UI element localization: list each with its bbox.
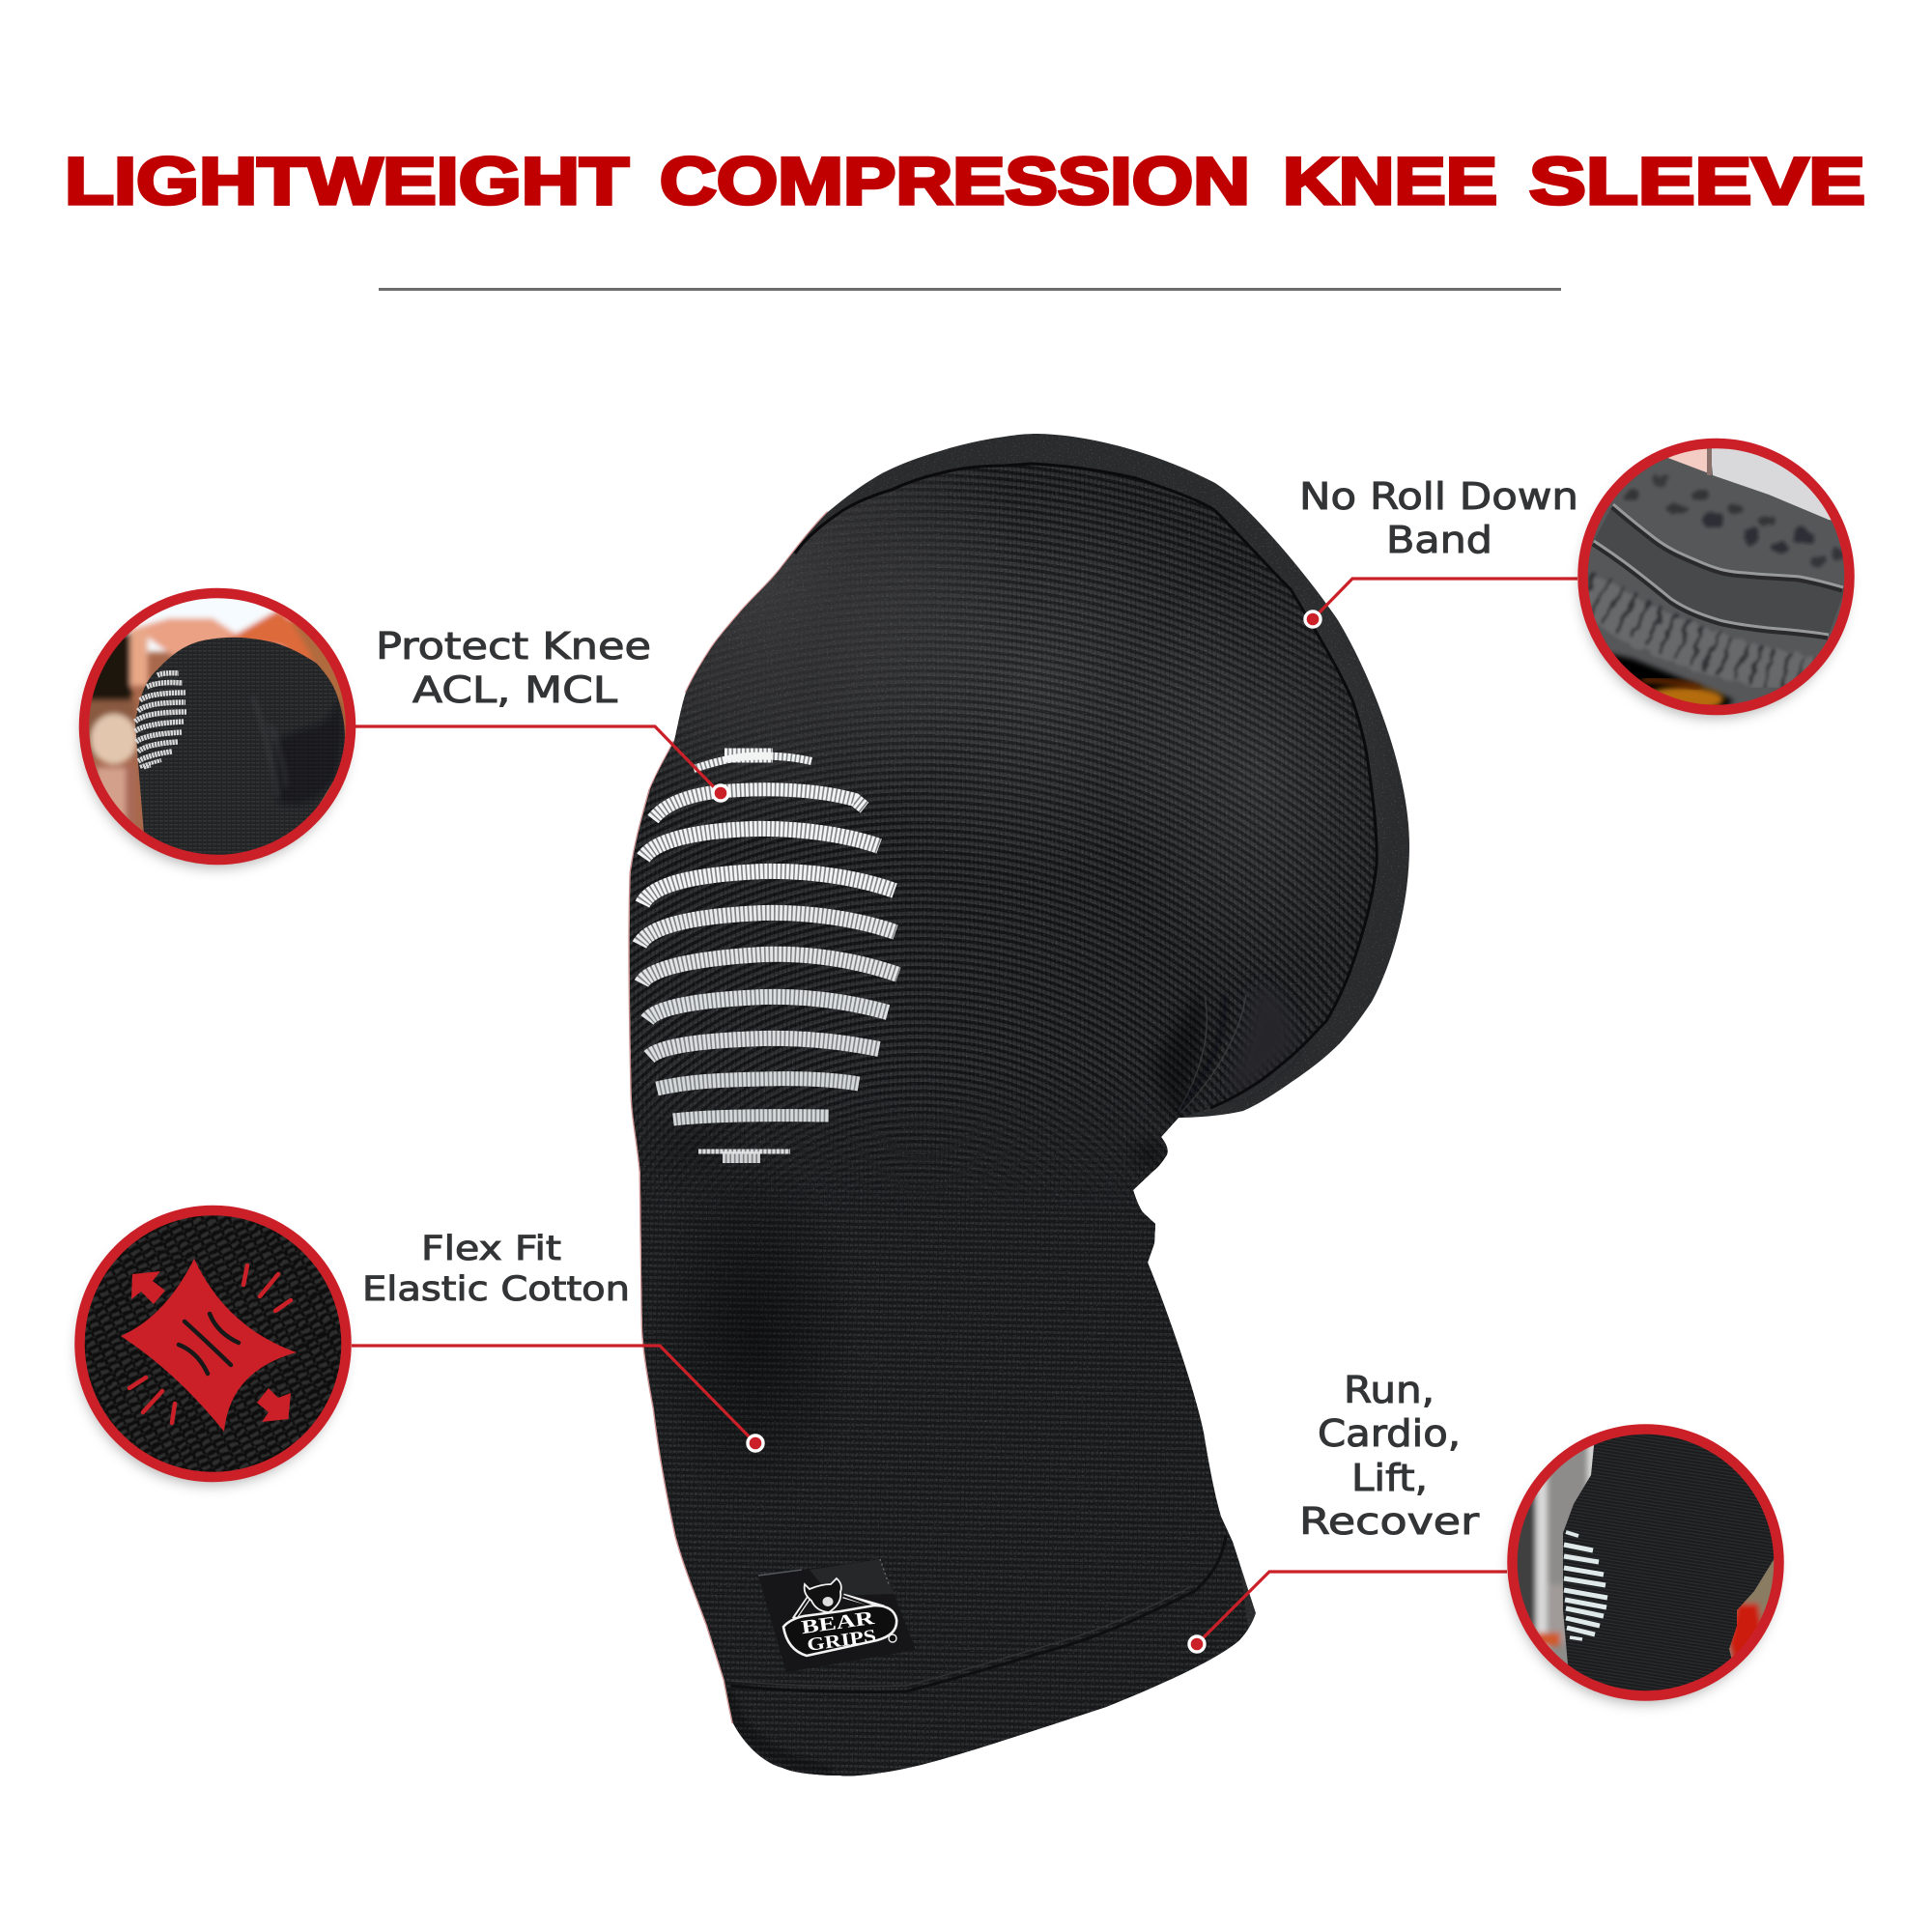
label: no roll down band: [1299, 475, 1578, 561]
label: no roll down band: No Roll Down: [1299, 475, 1578, 518]
label: activities: Cardio,: [1318, 1412, 1461, 1455]
title: COMPRESSION: [660, 144, 1250, 218]
label: protect knee: [376, 625, 651, 711]
circle photo: athlete knee side view: [77, 584, 357, 871]
knee crease folds: [1136, 985, 1298, 1167]
callout: run, cardio, lift, recover: [1189, 1369, 1787, 1710]
label: flex fit: Flex Fit: [421, 1230, 561, 1268]
title: [65, 144, 1865, 218]
label: activities: Recover: [1299, 1500, 1479, 1543]
title: LIGHTWEIGHT: [65, 144, 629, 218]
marker dot: protect knee: [713, 785, 728, 801]
label: protect knee: Protect Knee: [376, 625, 651, 668]
brand label: Bear Grips: GRIPS: [806, 1626, 877, 1656]
logo stripes on kneecap: [639, 755, 898, 1157]
circle photo: knee front view: [1507, 1425, 1787, 1710]
callout: no roll down band: [1299, 435, 1864, 720]
icon: stretched fabric diamond: [121, 1259, 297, 1432]
callout: protect knee: [77, 584, 728, 871]
marker dot: flex fit: [748, 1435, 763, 1451]
label: flex fit: Elastic Cotton: [362, 1270, 630, 1309]
marker dot: activities: [1189, 1636, 1205, 1652]
label: activities: Lift,: [1351, 1457, 1428, 1499]
circle photo: band close-up: [1579, 435, 1864, 720]
leader line: activities: [1197, 1572, 1507, 1644]
leader line: flex fit: [352, 1346, 755, 1443]
brand label: Bear Grips: BEAR: [800, 1607, 876, 1638]
title: SLEEVE: [1529, 144, 1865, 218]
leader line: no roll down band: [1313, 579, 1577, 619]
label: flex fit: [362, 1230, 630, 1309]
label: activities: [1299, 1369, 1479, 1543]
label: no roll down band: Band: [1386, 519, 1492, 561]
callout: flex fit: [75, 1208, 763, 1483]
label: protect knee: ACL, MCL: [412, 669, 617, 711]
marker dot: no roll down band: [1305, 611, 1321, 627]
label: activities: Run,: [1344, 1369, 1435, 1411]
knee sleeve product: [580, 406, 1449, 1835]
leader line: protect knee: [355, 726, 720, 793]
title: KNEE: [1283, 144, 1497, 218]
brand label: Bear Grips: [758, 1559, 916, 1672]
circle icon: stretch fabric: [75, 1208, 351, 1483]
